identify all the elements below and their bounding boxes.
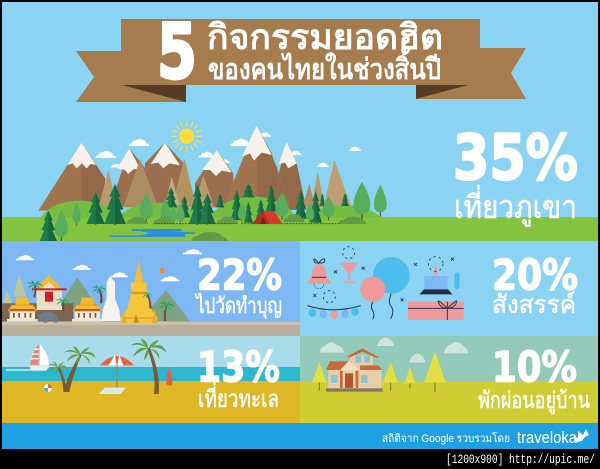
title: ของคนไทยในช่วงสิ้นปี (208, 47, 441, 86)
stat: 13% (197, 342, 280, 413)
sun dot (159, 268, 165, 273)
clouds (16, 249, 202, 281)
leaf trees (55, 182, 387, 241)
illustration: party items (306, 247, 464, 320)
hills (40, 197, 383, 251)
icon: sun (171, 121, 202, 152)
stat: 20% (492, 250, 578, 319)
icon: sparkles (323, 247, 443, 303)
yellow trees (312, 352, 446, 392)
icon: tent (252, 211, 283, 224)
elephant (38, 312, 57, 323)
palm trees (48, 338, 166, 394)
panel: party (300, 241, 598, 336)
confetti marks (313, 258, 454, 301)
temples (7, 275, 103, 322)
pine trees (40, 184, 349, 242)
title: กิจกรรมยอดฮิต (207, 18, 443, 57)
hills (3, 274, 190, 321)
title (157, 7, 443, 96)
icon: sailboat (6, 344, 50, 371)
stat: 22%: 22% (197, 250, 282, 300)
fence lines (155, 222, 340, 225)
icon: bell (306, 259, 333, 289)
icon: beach umbrella (100, 355, 134, 389)
title: 5 (157, 7, 197, 96)
icon: cocktail glass (339, 263, 359, 283)
stat: 10% (478, 342, 590, 414)
golden stupa (121, 260, 157, 323)
icon: bunting (307, 306, 361, 319)
stat: 35%: เที่ยวภูเขา (454, 185, 577, 227)
wall (2, 303, 73, 321)
palm trees (26, 280, 174, 321)
panel: mountains hero (2, 2, 598, 251)
stat: 22%: ไปวัดทำบุญ (194, 293, 282, 319)
icon: house (326, 348, 383, 392)
candy (454, 273, 460, 289)
footer bar (2, 423, 598, 449)
icon: gift box (408, 301, 464, 320)
beach towel (99, 388, 126, 394)
stat: 35%: 35% (453, 121, 578, 194)
stat: 13%: 13% (197, 342, 280, 392)
traveloka logo: traveloka (517, 429, 578, 447)
stat: 13%: เที่ยวทะเล (198, 382, 279, 413)
mountains (38, 125, 352, 211)
illustration: beach (6, 338, 172, 394)
white stupa (101, 277, 121, 321)
illustration: temples and stupa (2, 249, 202, 323)
stat: 20%: 20% (492, 250, 578, 300)
icon: balloons (360, 257, 410, 319)
panel: temple (2, 241, 300, 336)
pond (110, 229, 195, 237)
clouds (96, 132, 361, 167)
panel: home (300, 336, 598, 423)
illustration: mountain landscape (30, 121, 400, 251)
banner ribbon (76, 19, 526, 102)
stat: 20%: สังสรรค์ (492, 291, 576, 319)
icon: beach ball (44, 384, 52, 392)
source credit: สถิติจาก Google รวบรวมโดย (382, 431, 510, 445)
clouds (320, 337, 468, 363)
surfboard (166, 367, 172, 385)
stat: 35% (453, 121, 578, 227)
bushes (127, 214, 366, 242)
icon: cake (419, 267, 453, 294)
stat: 10%: 10% (492, 342, 577, 392)
panel: beach (2, 336, 300, 423)
illustration: house and trees (312, 337, 468, 392)
stat: 22% (194, 250, 282, 319)
